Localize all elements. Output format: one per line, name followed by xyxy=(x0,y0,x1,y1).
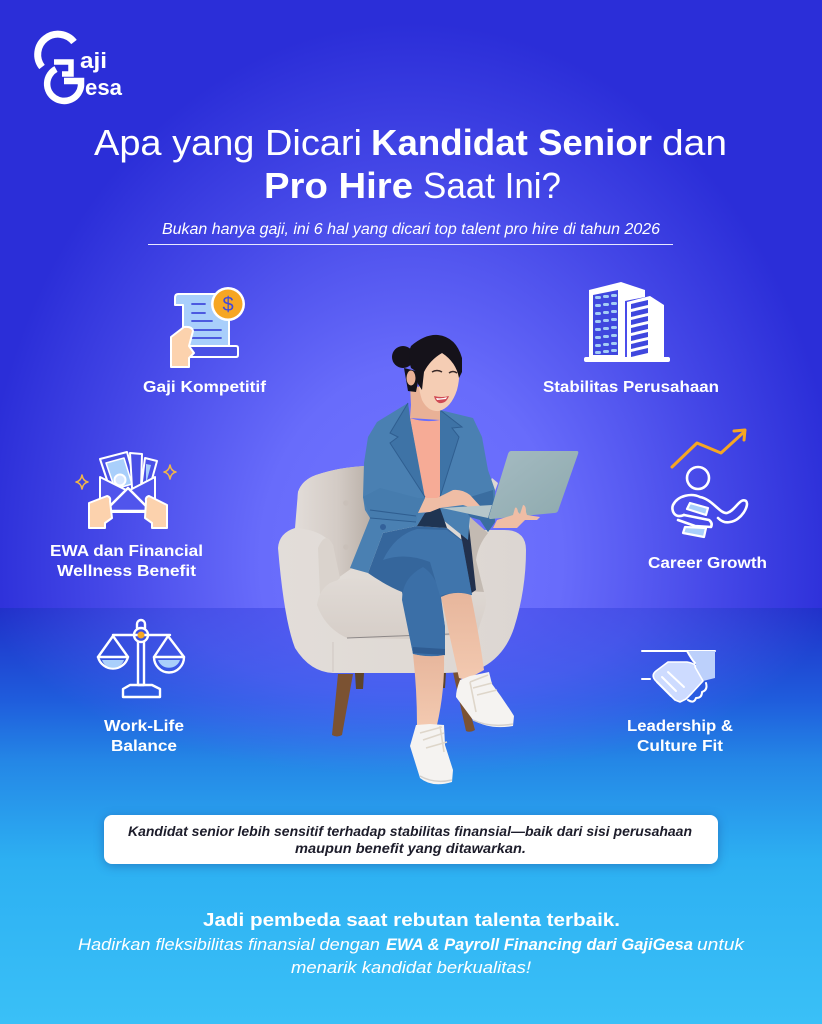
closing message xyxy=(78,910,745,977)
callout: maupun benefit yang ditawarkan. xyxy=(295,841,526,856)
background wall xyxy=(0,0,822,608)
label: Gaji Kompetitif: Gaji Kompetitif xyxy=(143,379,267,396)
title: Saat Ini? xyxy=(423,165,561,206)
laptop xyxy=(442,451,578,519)
title: Kandidat Senior xyxy=(371,122,652,163)
label: Work-Life Balance xyxy=(104,718,184,755)
left hand xyxy=(418,490,481,513)
label: Work-Life Balance: Work-Life xyxy=(104,718,184,735)
label: Leadership & Culture Fit xyxy=(627,718,733,755)
callout xyxy=(104,815,718,864)
closing message: menarik kandidat berkualitas! xyxy=(291,959,531,977)
closing message: Jadi pembeda saat rebutan talenta terbaik. xyxy=(203,910,620,930)
title: Apa yang Dicari xyxy=(94,122,362,163)
sneakers xyxy=(410,672,514,784)
icon: career growth xyxy=(672,430,747,537)
closing message: Hadirkan fleksibilitas finansial dengan xyxy=(78,936,380,954)
neck xyxy=(410,385,442,420)
head xyxy=(392,335,462,411)
title: Pro Hire xyxy=(264,165,413,206)
icon: handshake xyxy=(642,651,715,702)
top xyxy=(410,418,440,498)
icon: balance scale xyxy=(98,620,184,697)
trousers xyxy=(368,517,476,656)
closing message: untuk xyxy=(697,936,745,954)
label: Work-Life Balance: Balance xyxy=(111,738,177,755)
logo: GajiGesa: aji xyxy=(80,48,107,73)
icon: salary document: $ xyxy=(222,294,234,316)
title xyxy=(94,122,727,206)
icon: building xyxy=(584,282,670,362)
woman seated in armchair with laptop xyxy=(278,335,578,784)
logo: GajiGesa xyxy=(38,34,123,101)
armchair xyxy=(278,466,526,673)
label: Stabilitas Perusahaan: Stabilitas Perusahaan xyxy=(543,379,719,396)
icon: salary document xyxy=(171,287,245,367)
icon: money envelope xyxy=(76,452,176,528)
label: EWA dan Financial Wellness Benefit: EWA dan Financial xyxy=(50,543,203,560)
blazer xyxy=(350,403,495,573)
closing message: EWA & Payroll Financing dari GajiGesa xyxy=(386,936,693,954)
legs xyxy=(413,593,484,725)
background floor xyxy=(0,608,822,1024)
subtitle: Bukan hanya gaji, ini 6 hal yang dicari top talent pro hire di tahun 2026 xyxy=(162,221,660,238)
chair legs xyxy=(332,672,475,736)
label: Leadership & Culture Fit: Leadership & xyxy=(627,718,733,735)
label: Career Growth: Career Growth xyxy=(648,555,767,572)
right hand xyxy=(493,505,540,528)
logo: GajiGesa: esa xyxy=(85,75,123,100)
callout: Kandidat senior lebih sensitif terhadap stabilitas finansial—baik dari sisi perusahaan xyxy=(128,824,692,839)
label: EWA dan Financial Wellness Benefit xyxy=(50,543,203,580)
label: Leadership & Culture Fit: Culture Fit xyxy=(637,738,724,755)
label: EWA dan Financial Wellness Benefit: Wellness Benefit xyxy=(57,563,197,580)
title: dan xyxy=(662,122,727,163)
